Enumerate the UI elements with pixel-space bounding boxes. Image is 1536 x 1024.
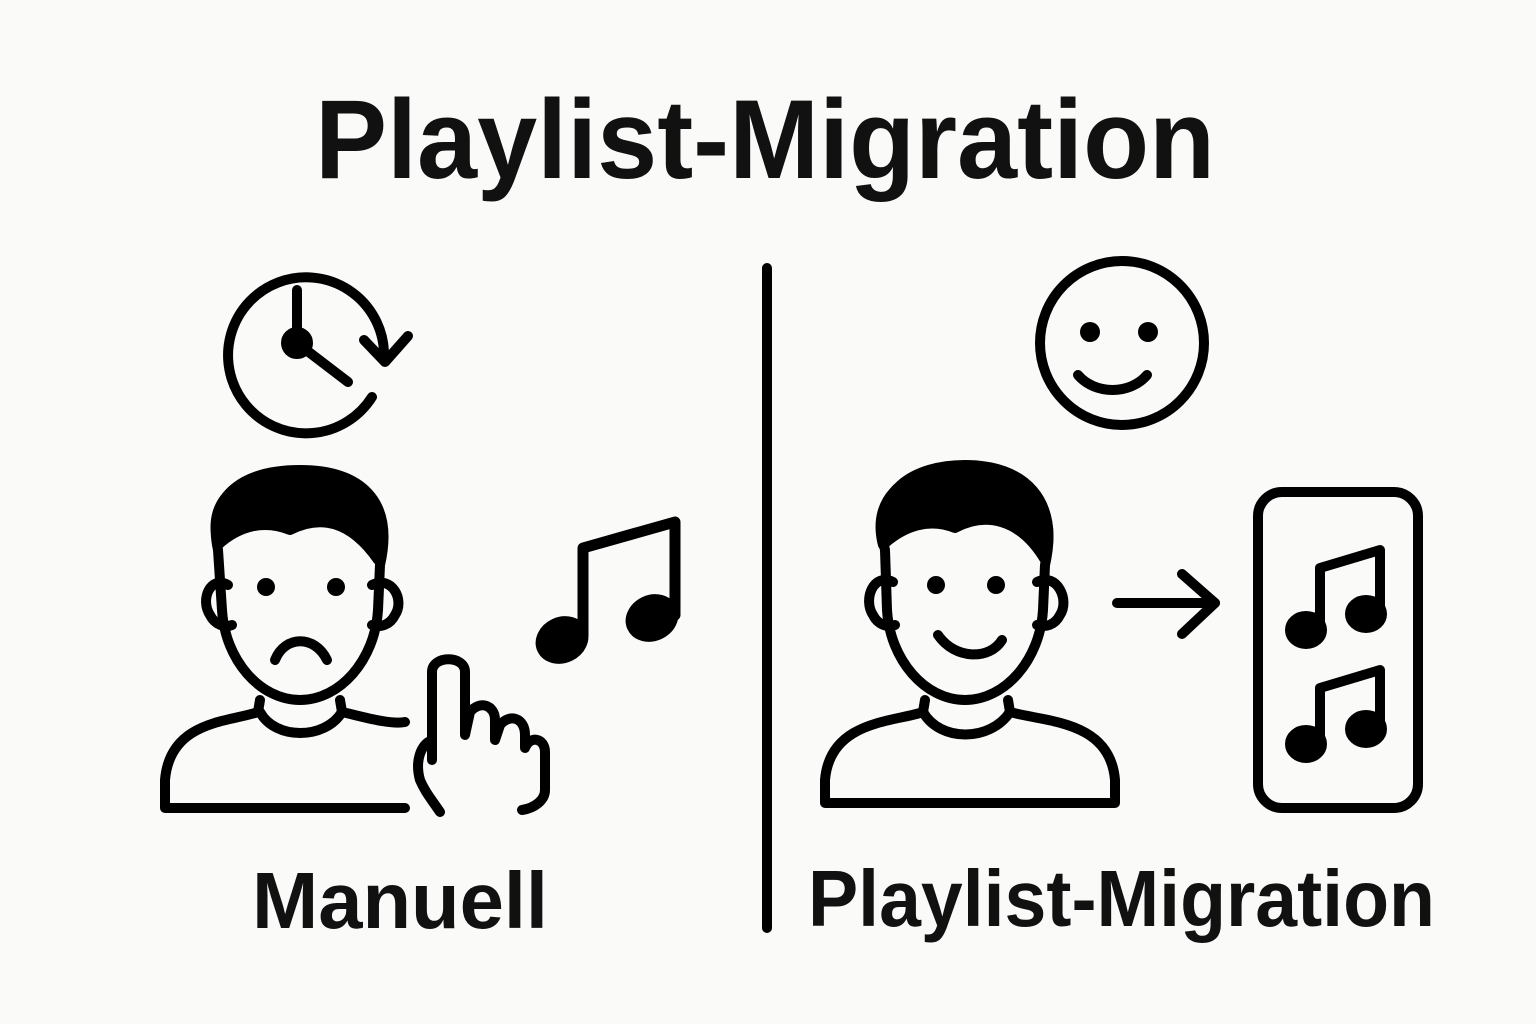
label: Playlist-Migration: Playlist-Migration: [808, 854, 1435, 943]
panel: playlist migration: [808, 261, 1435, 943]
icon: music note: [534, 522, 680, 666]
title: Playlist-Migration: [315, 77, 1215, 202]
icon: smiley: [1040, 261, 1204, 425]
icon: phone with music: [1258, 492, 1418, 808]
divider: [762, 268, 772, 928]
panel: manual: [165, 277, 680, 945]
label: Manuell: Manuell: [252, 856, 548, 945]
icon: sad person: [165, 470, 405, 808]
icon: clock with arrow: [228, 277, 408, 433]
arrow: [1117, 574, 1215, 634]
icon: happy person: [825, 465, 1115, 803]
icon: pointing hand: [418, 659, 545, 812]
